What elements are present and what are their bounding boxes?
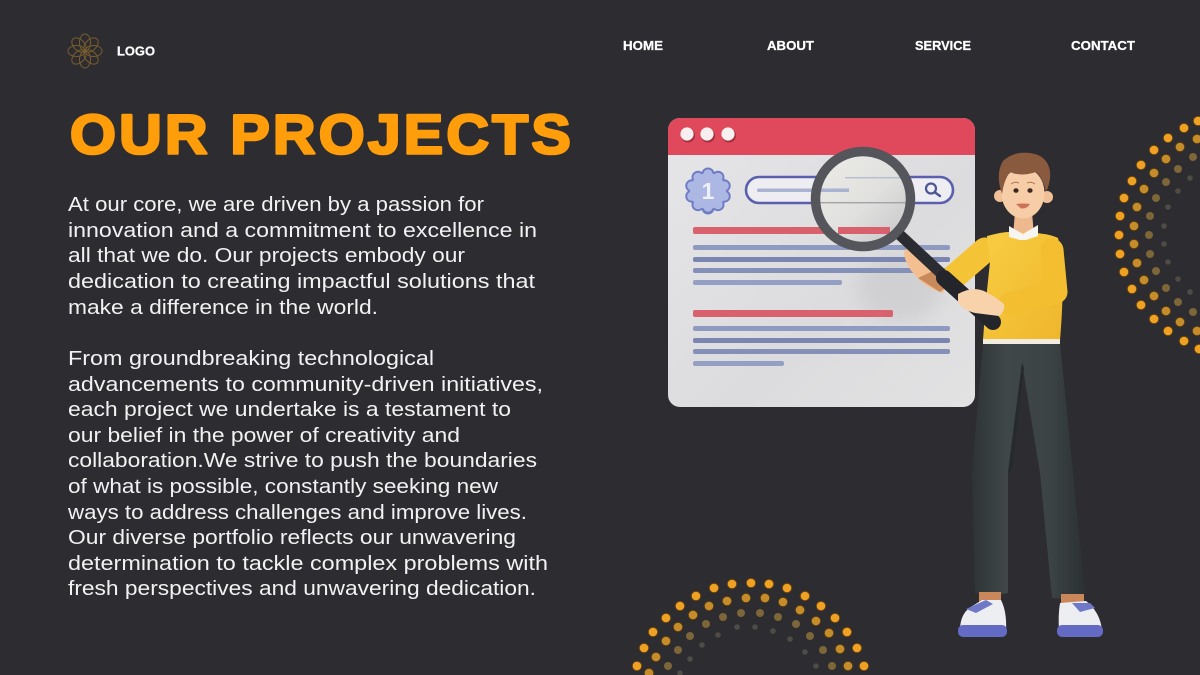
- handle grip: [944, 278, 993, 322]
- navigation: [623, 38, 1135, 53]
- right sleeve: [1010, 250, 1056, 304]
- text block: intro paragraph: innovation and a commitment to excellence in: [68, 220, 537, 242]
- content block 1: [693, 227, 950, 285]
- sweater hem: [983, 339, 1060, 344]
- text block: intro paragraph: At our core, we are driven by a passion for: [68, 194, 484, 216]
- navigation: HOME: [623, 38, 663, 53]
- content block 2: [693, 310, 950, 366]
- window control dots: [680, 127, 736, 142]
- navigation: CONTACT: [1071, 38, 1135, 53]
- handle neck: [900, 235, 945, 277]
- search bar: [746, 177, 953, 203]
- logo: [68, 34, 155, 68]
- left shoe: [958, 592, 1007, 637]
- lens ring: [816, 152, 910, 246]
- browser window illustration: [668, 118, 975, 407]
- shirt collar: [1009, 225, 1038, 240]
- text block: second paragraph: our belief in the power of creativity and: [68, 425, 460, 447]
- window title bar: [668, 118, 975, 155]
- top hand: [904, 247, 950, 293]
- right shoe: [1057, 594, 1103, 637]
- magnifying glass: [816, 152, 993, 322]
- title: OUR PROJECTS: [70, 102, 574, 166]
- text block: intro paragraph: dedication to creating impactful solutions that: [68, 271, 536, 293]
- navigation: SERVICE: [915, 38, 971, 53]
- soft shadow of hand on page: [858, 258, 942, 322]
- content seen through lens: [820, 177, 906, 234]
- window body: [668, 118, 975, 407]
- badge number 1: 1: [702, 178, 715, 204]
- text block: second paragraph: advancements to community-driven initiatives,: [68, 374, 543, 396]
- lens glass: [820, 156, 906, 242]
- logo text: LOGO: [117, 44, 155, 58]
- ears: [994, 190, 1053, 203]
- halftone arc: bottom: [632, 578, 869, 675]
- sweater torso: [983, 232, 1063, 340]
- text block: intro paragraph: [68, 194, 537, 319]
- left sleeve: [955, 250, 985, 276]
- neck: [1013, 212, 1034, 236]
- pants: [972, 343, 1085, 598]
- text block: second paragraph: From groundbreaking technological: [68, 348, 434, 370]
- face: [1002, 168, 1044, 218]
- text block: second paragraph: [67, 348, 548, 600]
- text block: second paragraph: of what is possible, constantly seeking new: [68, 476, 499, 498]
- text block: second paragraph: ways to address challenges and improve lives.: [67, 502, 527, 524]
- text block: second paragraph: collaboration.We strive to push the boundaries: [68, 450, 537, 472]
- icon: gold rosette: [68, 34, 102, 68]
- person illustration: [816, 152, 1103, 637]
- text block: second paragraph: fresh perspectives and unwavering dedication.: [68, 578, 536, 600]
- text block: second paragraph: determination to tackle complex problems with: [68, 553, 548, 575]
- badge number 1: [685, 168, 731, 214]
- text block: second paragraph: Our diverse portfolio reflects our unwavering: [68, 527, 516, 549]
- hair: [999, 153, 1050, 194]
- text block: intro paragraph: all that we do. Our projects embody our: [68, 245, 465, 267]
- navigation: ABOUT: [767, 38, 814, 53]
- eyes and mouth: [1011, 182, 1035, 209]
- bottom hand: [958, 289, 1004, 316]
- text block: intro paragraph: make a difference in the world.: [68, 297, 378, 319]
- text block: second paragraph: each project we undertake is a testament to: [68, 399, 511, 421]
- halftone arc: right: [1114, 116, 1200, 354]
